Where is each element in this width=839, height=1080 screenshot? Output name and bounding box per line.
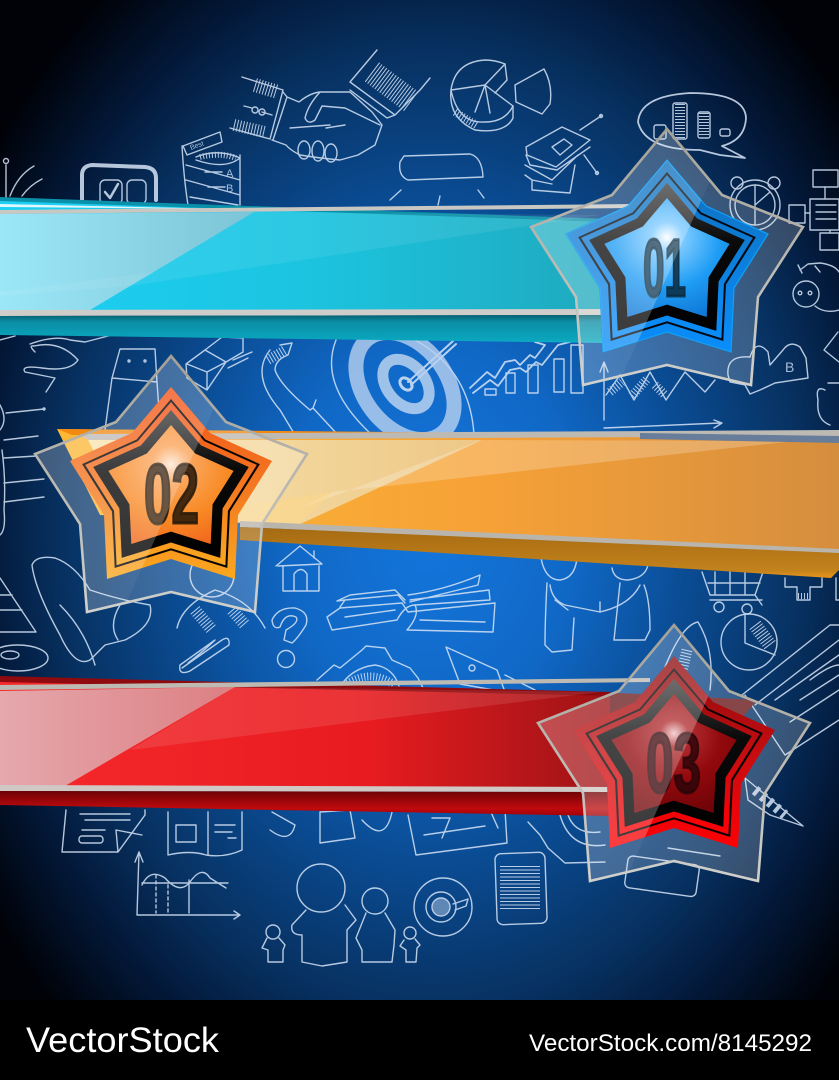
glass star xyxy=(538,625,810,881)
number 03: 03 xyxy=(646,716,701,810)
banner 1 glass frame xyxy=(0,204,640,214)
doodle: right edge icons xyxy=(817,332,839,425)
glass star xyxy=(35,356,307,612)
doodle: coffee cup xyxy=(414,878,472,936)
number 02: 02 xyxy=(144,447,199,541)
doodle: diploma xyxy=(408,810,507,855)
doodle: phone and pen xyxy=(624,848,720,897)
doodle: checkbox panel xyxy=(82,165,156,204)
doodle: mouse rocket xyxy=(32,557,151,665)
doodle: org chart xyxy=(789,170,839,250)
doodle: house xyxy=(276,546,322,591)
doodle: database best: B xyxy=(226,183,233,195)
doodle: function graph xyxy=(135,852,240,919)
footer url: VectorStock.com/8145292 xyxy=(529,1030,812,1057)
doodle: open book xyxy=(327,575,495,632)
banner 3 gloss xyxy=(0,687,235,786)
doodle: hat cap xyxy=(0,335,112,344)
doodle: puzzle pieces: B xyxy=(785,359,794,375)
doodle: database best: Best xyxy=(189,140,205,152)
doodle: striped pencil tip xyxy=(745,778,803,826)
doodle: two people shaking hands xyxy=(541,558,650,652)
doodle: shopping cart xyxy=(702,572,763,614)
banner 2 tip and body xyxy=(57,429,839,553)
badge: star 03 xyxy=(534,616,810,896)
doodle: pen and keyboard xyxy=(742,625,839,755)
coloured star layers xyxy=(573,656,775,848)
doodle: rounded label with arrows xyxy=(390,154,484,205)
doodle: clock pie xyxy=(721,614,777,670)
doodle: paperclip xyxy=(180,638,229,673)
banner 1 lower strip xyxy=(0,315,610,343)
banner 3 body xyxy=(0,677,610,790)
doodle: wrench icons xyxy=(785,578,839,600)
banner 1 body xyxy=(0,198,610,312)
doodle: family figures xyxy=(262,864,420,966)
footer brand: VectorStock xyxy=(26,1021,220,1060)
doodle: pyramid xyxy=(0,578,36,632)
doodle: iron shape xyxy=(660,622,711,690)
badge: star 01: 01 xyxy=(643,223,686,314)
doodle: handshake xyxy=(230,50,430,162)
doodle: cubes xyxy=(186,337,252,390)
glass star xyxy=(531,129,803,385)
banner 3 glass frame xyxy=(0,678,650,690)
banner 2 lower strip xyxy=(240,527,839,578)
doodle: target with arrow xyxy=(332,313,474,459)
banner 3: red xyxy=(0,676,757,816)
banner 3 lower strip xyxy=(0,791,610,816)
doodle: squiggle xyxy=(24,345,78,392)
doodle: pie chart xyxy=(451,60,551,131)
badge: star 01 xyxy=(527,120,803,400)
doodle: database best xyxy=(182,132,240,205)
doodle: disc xyxy=(0,645,48,671)
doodle: document xyxy=(62,810,145,852)
glare xyxy=(540,628,716,879)
doodle: tablet xyxy=(495,852,547,925)
doodle: alarm clock xyxy=(730,177,780,230)
doodle: branching arrows xyxy=(4,158,42,198)
doodle: question mark xyxy=(272,608,307,668)
doodle: gear xyxy=(317,646,424,690)
banner 3 extension behind star xyxy=(600,692,757,790)
doodle: curved arrow xyxy=(262,343,338,435)
coloured star layers xyxy=(566,160,768,352)
doodle: piggy bank xyxy=(793,263,839,311)
doodle: gear under ribbon xyxy=(528,815,605,863)
banner 2 glass frame xyxy=(80,430,839,440)
coloured star layers xyxy=(70,387,272,579)
doodle: stack of books xyxy=(525,114,602,193)
footer bar xyxy=(0,1000,839,1080)
doodle: callout lines xyxy=(0,405,45,535)
doodle: magazine xyxy=(168,812,242,856)
doodle: mountain line chart xyxy=(600,362,722,428)
banner 1: cyan xyxy=(0,197,640,343)
doodle: letters SEO xyxy=(270,810,392,843)
glare xyxy=(534,132,709,383)
banner 2: orange xyxy=(57,429,839,578)
doodle: coins speech bubble xyxy=(638,93,746,158)
doodle: paper laptop xyxy=(446,647,535,692)
doodle: bar chart with zigzag arrow xyxy=(470,342,583,395)
doodle: database best: A xyxy=(226,168,234,180)
doodle: usb pendrive xyxy=(105,349,160,430)
doodle: businessman xyxy=(177,553,265,630)
glare xyxy=(38,358,213,610)
badge: star 02 xyxy=(31,347,307,627)
doodle: puzzle pieces xyxy=(728,344,808,394)
banner 1 gloss xyxy=(0,212,254,310)
banner 2 gloss xyxy=(88,440,482,526)
